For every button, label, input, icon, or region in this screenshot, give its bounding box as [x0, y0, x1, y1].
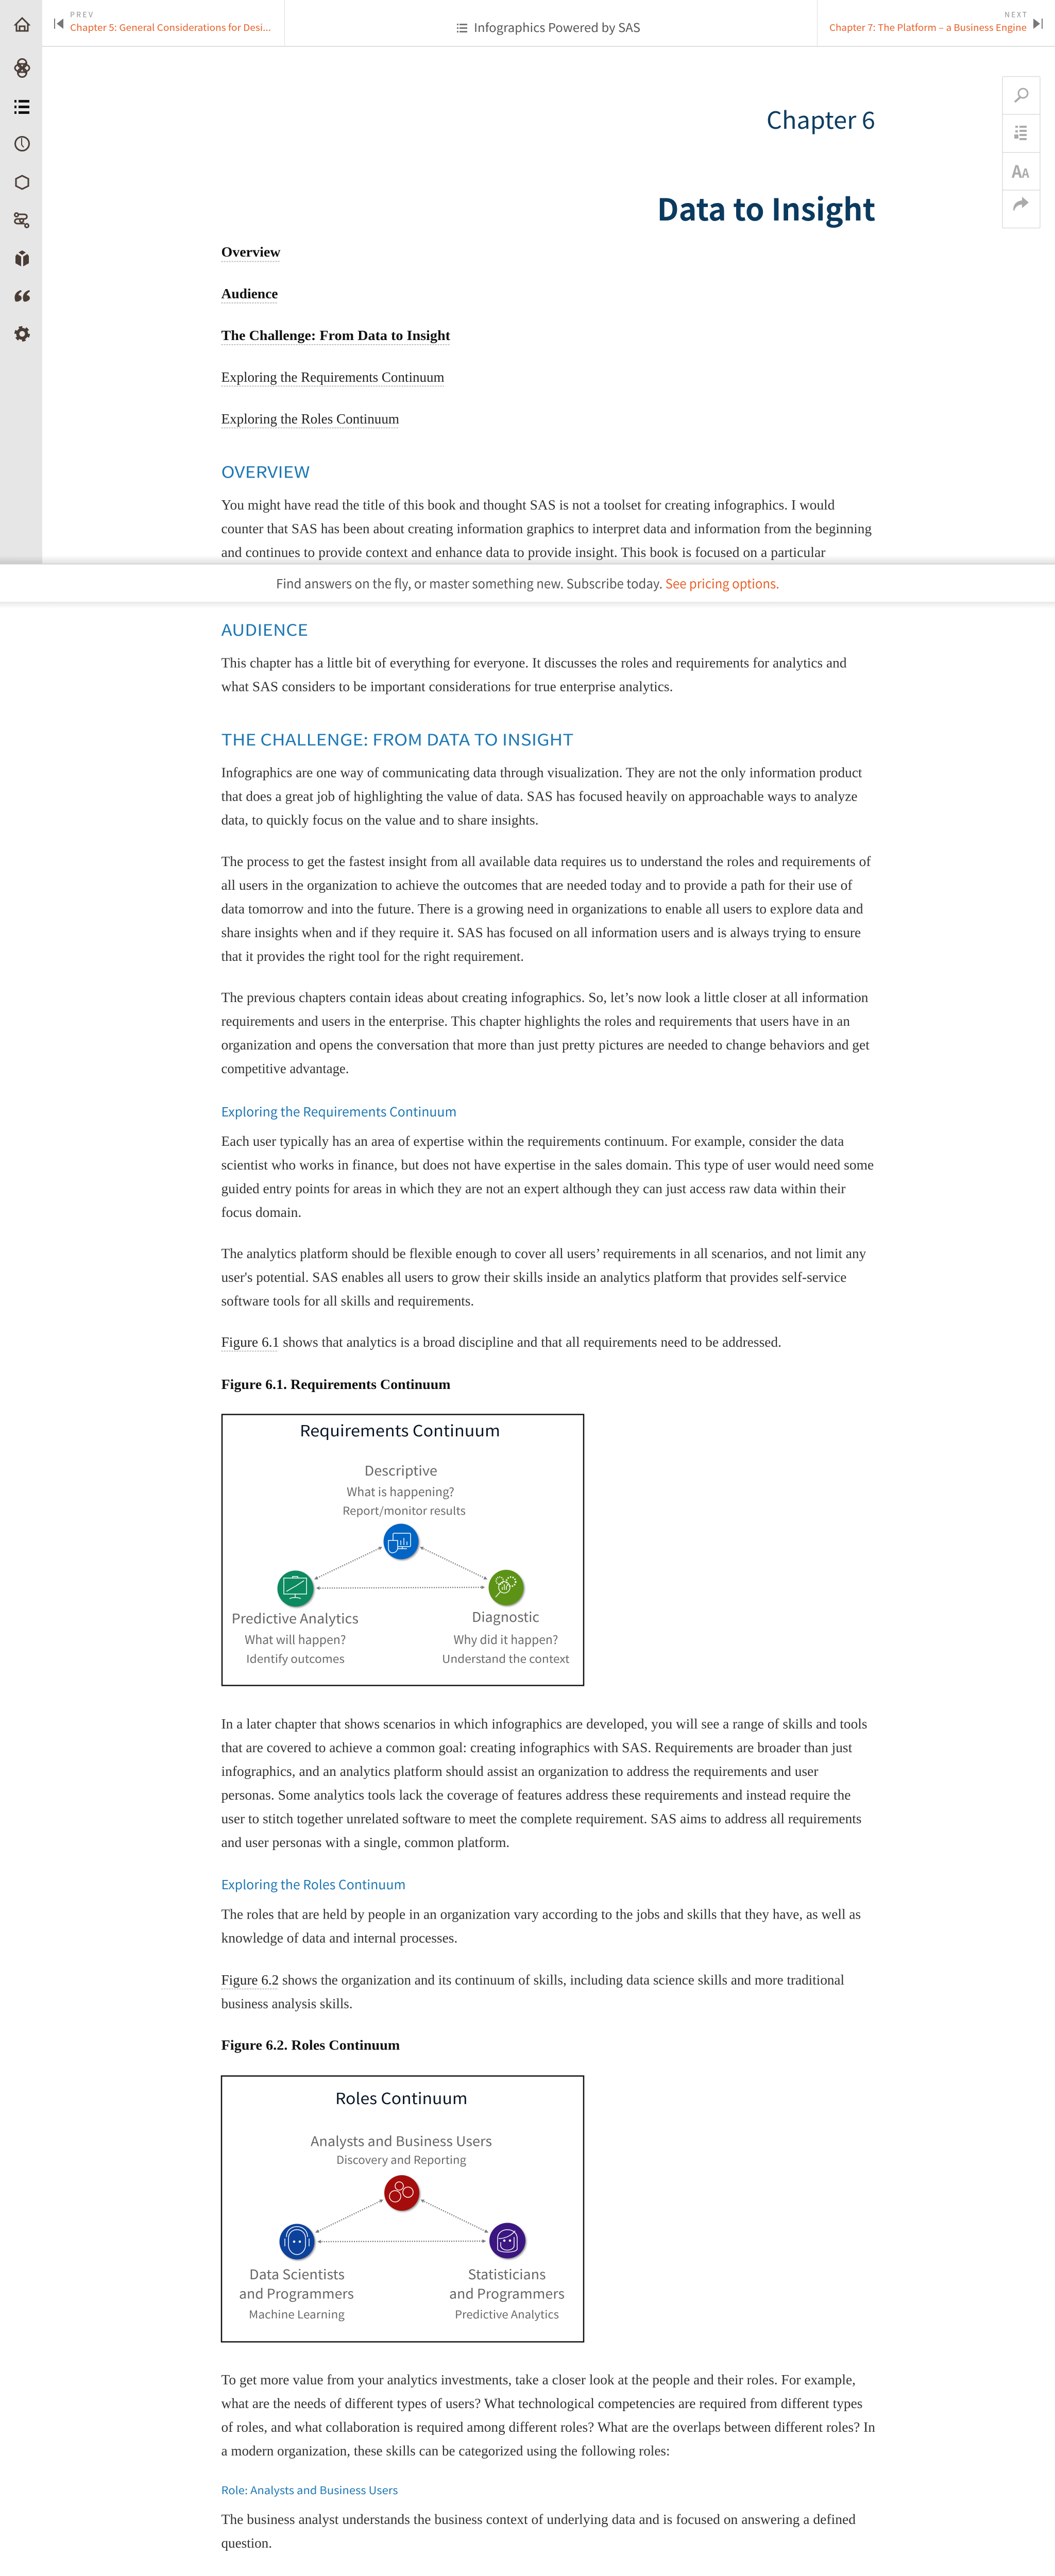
icon: hexagon: [16, 176, 28, 189]
heading: the challenge: THE CHALLENGE: FROM DATA TO INSIGHT: [222, 727, 574, 750]
paragraph: user expertise: scientist who works in finance, but does not have expertise in the sales domain. This type of user would need some: [222, 1157, 874, 1173]
node: descriptive: Descriptive: [365, 1461, 437, 1480]
paragraph: infographics: Infographics are one way of communicating data through visualization. They are not the only information product: [222, 765, 862, 780]
icon: quotation marks: [14, 290, 30, 302]
paragraph: closer look at roles: To get more value from your analytics investments, take a closer look at the people and their roles. For example,: [222, 2371, 856, 2387]
node: diagnostic: [442, 1570, 570, 1666]
diagram title: Roles Continuum: [335, 2086, 468, 2109]
paragraph: figure 6.1 reference: Figure 6.1 shows that analytics is a broad discipline and that all requirements need to be addressed.: [222, 1334, 781, 1350]
icon: share arrow: [1013, 197, 1029, 211]
paragraph: user expertise: focus domain.: [222, 1204, 301, 1220]
paragraph: infographics: that does a great job of highlighting the value of data. SAS has focused heavily on approachable ways to analyze: [222, 788, 857, 804]
node: statisticians and programmers: Predictive Analytics: [455, 2307, 559, 2322]
paragraph: closer look at roles: [222, 2371, 875, 2459]
paragraph: previous chapters: requirements and users in the enterprise. This chapter highlights the roles and requirements that users have in an: [222, 1013, 850, 1029]
paragraph: later chapter: [222, 1716, 867, 1850]
subscribe banner: [0, 555, 1055, 608]
node: predictive analytics: What will happen?: [245, 1630, 346, 1648]
paragraph: roles: The roles that are held by people in an organization vary according to the jobs and skills that they have, as well as: [222, 1906, 861, 1922]
top navigation bar: [42, 0, 1055, 47]
previous chapter link: PREV: [70, 9, 93, 20]
paragraph: infographics: data, to quickly focus on the value and to share insights.: [222, 812, 539, 827]
icon: connected nodes: [14, 213, 29, 228]
arrow: descriptive to predictive: [316, 1548, 381, 1579]
icon: list: [14, 100, 29, 114]
paragraph: overview: You might have read the title of this book and thought SAS is not a toolset for creating infographics. I would: [222, 497, 835, 513]
figure caption 6.2: Figure 6.2. Roles Continuum: [222, 2037, 400, 2053]
node: data scientists and programmers: and Programmers: [239, 2283, 354, 2303]
table of contents: Exploring the Roles Continuum: [222, 411, 399, 427]
paragraph: user expertise: [222, 1133, 874, 1220]
node: data scientists and programmers: Data Scientists: [249, 2264, 345, 2283]
paragraph: analytics platform: [222, 1245, 866, 1309]
paragraph: overview: counter that SAS has been about creating information graphics to interpret data and information from the beginning: [222, 520, 872, 536]
paragraph: user expertise: guided entry points for areas in which they are not an expert although they can just access raw data within their: [222, 1180, 846, 1196]
paragraph: previous chapters: organization and opens the conversation that more than just pretty pictures are needed to change behaviors and get: [222, 1037, 870, 1053]
node: statisticians and programmers: [449, 2223, 565, 2322]
paragraph: later chapter: infographics, and an analytics platform should assist an organization to address the requirements and user: [222, 1763, 818, 1779]
paragraph: audience: what SAS considers to be important considerations for true enterprise analytics.: [222, 678, 673, 694]
paragraph: figure 6.2 reference: business analysis skills.: [222, 1995, 352, 2011]
node: predictive analytics: [232, 1570, 359, 1666]
paragraph: process: [222, 853, 871, 964]
arrow: descriptive to diagnostic: [421, 1548, 486, 1579]
figure caption 6.1: Figure 6.1. Requirements Continuum: [222, 1376, 451, 1392]
node: analysts and business users: Discovery and Reporting: [336, 2152, 466, 2167]
paragraph: analytics platform: The analytics platform should be flexible enough to cover all users’ requirements in all scenarios, and not limit any: [222, 1245, 866, 1261]
paragraph: analytics platform: software tools for all skills and requirements.: [222, 1293, 474, 1309]
node: descriptive: Report/monitor results: [343, 1503, 466, 1518]
node: descriptive: What is happening?: [347, 1482, 454, 1500]
paragraph: previous chapters: [222, 989, 870, 1076]
paragraph: business analyst: [222, 2511, 856, 2551]
paragraph: later chapter: user to stitch together unrelated software to meet the complete requirement. SAS aims to address all requirements: [222, 1810, 861, 1826]
arrow: data scientists to statisticians: [319, 2241, 484, 2242]
paragraph: process: that it provides the right tool for the right requirement.: [222, 948, 524, 964]
subscribe banner: Find answers on the fly, or master something new. Subscribe today. See pricing options.: [276, 574, 779, 592]
node: diagnostic: Diagnostic: [472, 1607, 539, 1626]
arrow: analysts to statisticians: [422, 2200, 487, 2232]
table of contents: Exploring the Requirements Continuum: [222, 369, 444, 385]
node: data scientists and programmers: [239, 2224, 354, 2322]
paragraph: later chapter: In a later chapter that shows scenarios in which infographics are developed, you will see a range of skills and tools: [222, 1716, 867, 1732]
paragraph: later chapter: that are covered to achieve a common goal: creating infographics with SAS. Requirements are broader than just: [222, 1739, 853, 1755]
node: predictive analytics: Identify outcomes: [246, 1651, 345, 1666]
paragraph: figure 6.2 reference: [222, 1972, 844, 2011]
node: analysts and business users: Analysts and Business Users: [311, 2131, 492, 2150]
node: statisticians and programmers: and Programmers: [449, 2283, 565, 2303]
next chapter link: NEXT: [1005, 9, 1027, 20]
heading: analysts role: Role: Analysts and Business Users: [222, 2482, 398, 2497]
chapter number: Chapter 6: [767, 102, 875, 136]
chapter title: Data to Insight: [657, 185, 876, 229]
paragraph: roles: [222, 1906, 861, 1945]
section: exploring the roles continuum: [222, 1875, 861, 2053]
paragraph: business analyst: question.: [222, 2535, 272, 2551]
figure: roles continuum diagram: [222, 2076, 584, 2342]
icon: clock: [15, 137, 29, 150]
node: diagnostic: Understand the context: [442, 1651, 570, 1666]
figure: requirements continuum diagram: [222, 1415, 584, 1686]
reader toolbar: [1002, 76, 1040, 228]
paragraph: analytics platform: user's potential. SAS enables all users to grow their skills inside an analytics platform that provides self-service: [222, 1269, 846, 1285]
paragraph: overview: and continues to provide context and enhance data to provide insight. This book is focused on a particular: [222, 544, 825, 560]
arrow: predictive to diagnostic: [318, 1587, 483, 1588]
icon: search: [1015, 89, 1028, 102]
icon: add to list: [1014, 126, 1027, 140]
paragraph: figure 6.2 reference: Figure 6.2 shows the organization and its continuum of skills, including data science skills and more traditional: [222, 1972, 844, 1988]
table of contents: Overview: [222, 244, 281, 260]
node: data scientists and programmers: Machine Learning: [249, 2307, 345, 2322]
section: the challenge: [222, 727, 871, 1076]
node: analysts and business users: [311, 2131, 492, 2211]
paragraph: closer look at roles: of roles, and what collaboration is required among different roles? What are the overlaps between different roles? In: [222, 2419, 875, 2435]
icon: home: [15, 18, 29, 31]
diagram title: Requirements Continuum: [300, 1418, 500, 1441]
paragraph: later chapter: personas. Some analytics tools lack the coverage of features address these requirements and instead require the: [222, 1787, 851, 1803]
heading: roles continuum: Exploring the Roles Continuum: [222, 1875, 406, 1893]
paragraph: user expertise: Each user typically has an area of expertise within the requirements continuum. For example, consider the data: [222, 1133, 844, 1149]
icon: package: [15, 250, 29, 266]
paragraph: audience: This chapter has a little bit of everything for everyone. It discusses the roles and requirements for analytics and: [222, 654, 847, 671]
section: audience: [222, 617, 847, 694]
paragraph: audience: [222, 654, 847, 694]
previous chapter link: Chapter 5: General Considerations for Desi...: [70, 21, 271, 34]
heading: audience: AUDIENCE: [222, 617, 308, 640]
section: overview: [222, 460, 872, 560]
icon: gear: [15, 327, 29, 341]
paragraph: overview: [222, 497, 872, 560]
node: statisticians and programmers: Statisticians: [468, 2264, 546, 2283]
table of contents: The Challenge: From Data to Insight: [222, 327, 451, 343]
paragraph: closer look at roles: a modern organization, these skills can be categorized using the following roles:: [222, 2443, 670, 2459]
icon: topics knot: [15, 59, 29, 77]
icon: font size: AA: [1011, 158, 1030, 183]
previous chapter link: [54, 9, 271, 34]
paragraph: previous chapters: competitive advantage.: [222, 1060, 349, 1076]
next chapter link: [829, 9, 1043, 34]
table of contents: [222, 244, 451, 428]
heading: overview: OVERVIEW: [222, 460, 310, 482]
paragraph: process: data tomorrow and into the future. There is a growing need in organizations to enable all users to explore data and: [222, 901, 863, 917]
sidebar navigation: [0, 0, 42, 564]
node: diagnostic: Why did it happen?: [453, 1630, 558, 1648]
table of contents: Audience: [222, 285, 278, 301]
paragraph: process: all users in the organization to achieve the outcomes that are needed today and to provide a path for their use of: [222, 877, 853, 893]
heading: requirements continuum: Exploring the Requirements Continuum: [222, 1103, 456, 1121]
paragraph: business analyst: The business analyst understands the business context of underlying data and is focused on answering a defined: [222, 2511, 856, 2527]
paragraph: later chapter: and user personas with a single, common platform.: [222, 1834, 509, 1850]
section: exploring the requirements continuum: [222, 1103, 874, 1392]
book title: Infographics Powered by SAS: [474, 18, 640, 36]
paragraph: process: The process to get the fastest insight from all available data requires us to understand the roles and requirements of: [222, 853, 871, 869]
paragraph: previous chapters: The previous chapters contain ideas about creating infographics. So, let’s now look a little closer at all information: [222, 989, 869, 1005]
paragraph: roles: knowledge of data and internal processes.: [222, 1930, 457, 1945]
paragraph: process: share insights when and if they require it. SAS has focused on all information users and is always trying to ensure: [222, 924, 861, 940]
paragraph: infographics: [222, 765, 862, 827]
node: descriptive: [343, 1461, 466, 1559]
arrow: analysts to data scientists: [317, 2200, 382, 2232]
chapter heading: [657, 102, 876, 229]
role: analysts and business users: [222, 2482, 856, 2576]
next chapter link: Chapter 7: The Platform – a Business Engine: [829, 21, 1027, 34]
paragraph: closer look at roles: what are the needs of different types of users? What technological competencies are required from different types: [222, 2395, 862, 2411]
node: predictive analytics: Predictive Analytics: [232, 1608, 359, 1628]
